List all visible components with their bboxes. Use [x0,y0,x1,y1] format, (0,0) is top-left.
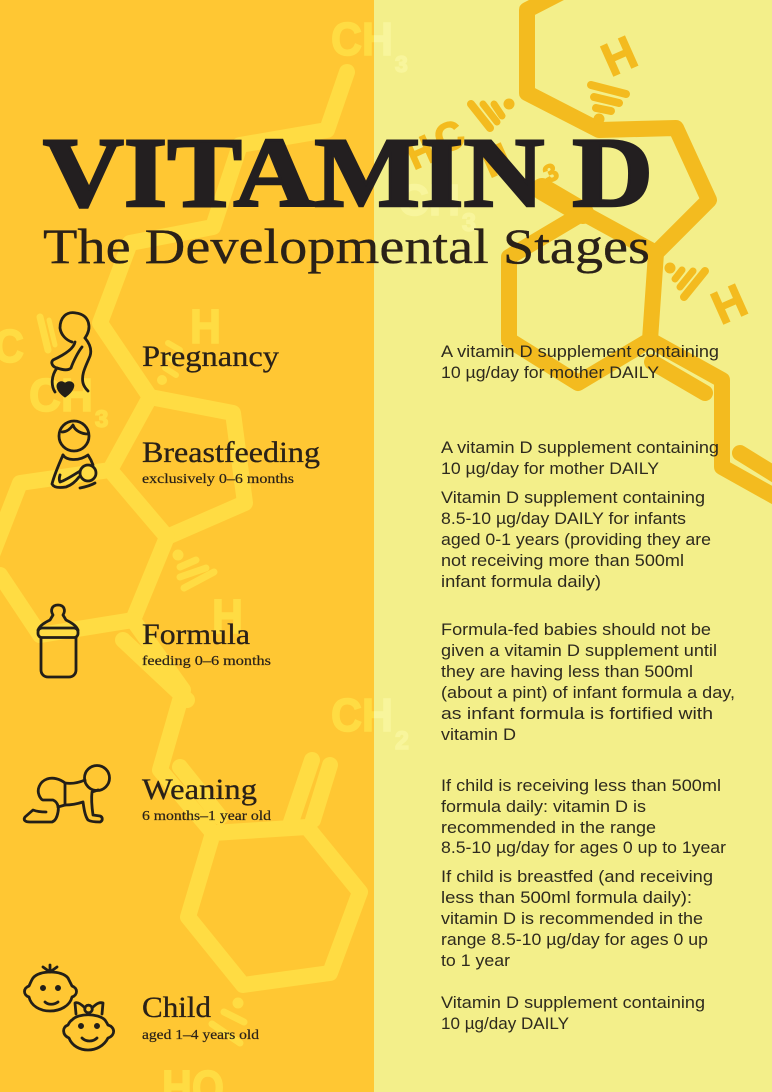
right molecule diagram: H [476,135,517,186]
right molecule diagram: H [594,26,644,86]
text: pregnancy advice: A vitamin D supplement containing [441,342,719,361]
text: formula advice: (about a pint) of infant formula a day, [441,683,735,702]
left molecule diagram: 3 [95,406,108,433]
text: formula advice: they are having less than 500ml [441,662,693,681]
left molecule diagram: CH [29,369,93,421]
text: breastfeeding advice for infants: Vitamin D supplement containing [441,488,705,507]
stage: formula label [142,618,271,669]
text: breastfeeding advice for infants: 8.5-10 µg/day DAILY for infants [441,509,686,528]
stage: formula label: feeding 0–6 months [142,654,271,669]
left molecule diagram: H [212,591,243,644]
left background panel [0,0,374,1092]
text: child advice [441,993,705,1033]
icon: breastfeeding mother [52,421,96,488]
text: weaning advice, formula: formula daily: vitamin D is [441,797,646,816]
text: breastfeeding advice for infants: infant formula daily) [441,572,601,591]
stage: weaning label: Weaning [142,773,257,806]
text: child advice: Vitamin D supplement containing [441,993,705,1012]
stage: child label [142,991,259,1043]
text: formula advice: vitamin D [441,725,516,744]
right molecule diagram: CH [331,13,393,65]
text: breastfeeding advice for mother [441,438,719,478]
right molecule diagram: H [400,127,441,178]
text: weaning advice, breastfed: to 1 year [441,951,510,970]
left molecule diagram [0,13,393,1092]
stage: breastfeeding label: exclusively 0–6 months [142,472,294,487]
icon: baby bottle [38,605,78,677]
title: VITAMIN D [43,117,653,228]
text: formula advice: Formula-fed babies should not be [441,620,711,639]
text: breastfeeding advice for mother: A vitamin D supplement containing [441,438,719,457]
left molecule diagram: CH [331,13,393,65]
stage: weaning label: 6 months–1 year old [142,809,271,824]
text: weaning advice, breastfed: If child is breastfed (and receiving [441,867,713,886]
text: weaning advice, formula: If child is receiving less than 500ml [441,776,721,795]
right molecule diagram [331,0,772,755]
text: breastfeeding advice for infants: not receiving more than 500ml [441,551,684,570]
stage: child label: Child [142,991,211,1024]
subtitle: The Developmental Stages [43,218,650,274]
text: weaning advice, breastfed: vitamin D is recommended in the [441,909,703,928]
text: formula advice: given a vitamin D supplement until [441,641,717,660]
text: weaning advice, formula: recommended in the range [441,818,656,837]
text: pregnancy advice: 10 µg/day for mother DAILY [441,363,659,382]
right background panel [374,0,772,1092]
text: child advice: 10 µg/day DAILY [441,1014,569,1033]
right molecule diagram: C [428,112,471,163]
icon: pregnant woman [52,313,91,396]
right molecule diagram: 3 [462,209,476,237]
stage: weaning label [142,773,271,824]
text: weaning advice, formula: 8.5-10 µg/day for ages 0 up to 1year [441,838,726,857]
text: weaning advice, breastfed [441,867,713,970]
text: pregnancy advice [441,342,719,382]
stage: breastfeeding label: Breastfeeding [142,436,320,469]
text: weaning advice, breastfed: less than 500ml formula daily): [441,888,692,907]
stage: child label: aged 1–4 years old [142,1028,259,1043]
text: formula advice: as infant formula is fortified with [441,704,713,723]
stage: formula label: Formula [142,618,250,651]
icon: two baby faces [24,965,114,1050]
text: weaning advice, formula [441,776,726,857]
left molecule diagram: H [190,301,221,354]
right molecule diagram: 3 [395,51,408,77]
stage: breastfeeding label [142,436,320,487]
right molecule diagram: CH [398,176,460,225]
icon: crawling baby [24,766,109,822]
stage: pregnancy label: Pregnancy [142,340,279,373]
left molecule diagram: CH [331,689,393,741]
text: breastfeeding advice for infants: aged 0-1 years (providing they are [441,530,711,549]
right molecule diagram: CH [331,689,393,741]
right molecule diagram: 2 [395,727,409,755]
text: breastfeeding advice for mother: 10 µg/day for mother DAILY [441,459,659,478]
text: weaning advice, breastfed: range 8.5-10 µg/day for ages 0 up [441,930,708,949]
right molecule diagram: H [704,274,754,334]
right molecule diagram: 3 [539,158,563,188]
text: formula advice [441,620,735,744]
text: breastfeeding advice for infants [441,488,711,591]
